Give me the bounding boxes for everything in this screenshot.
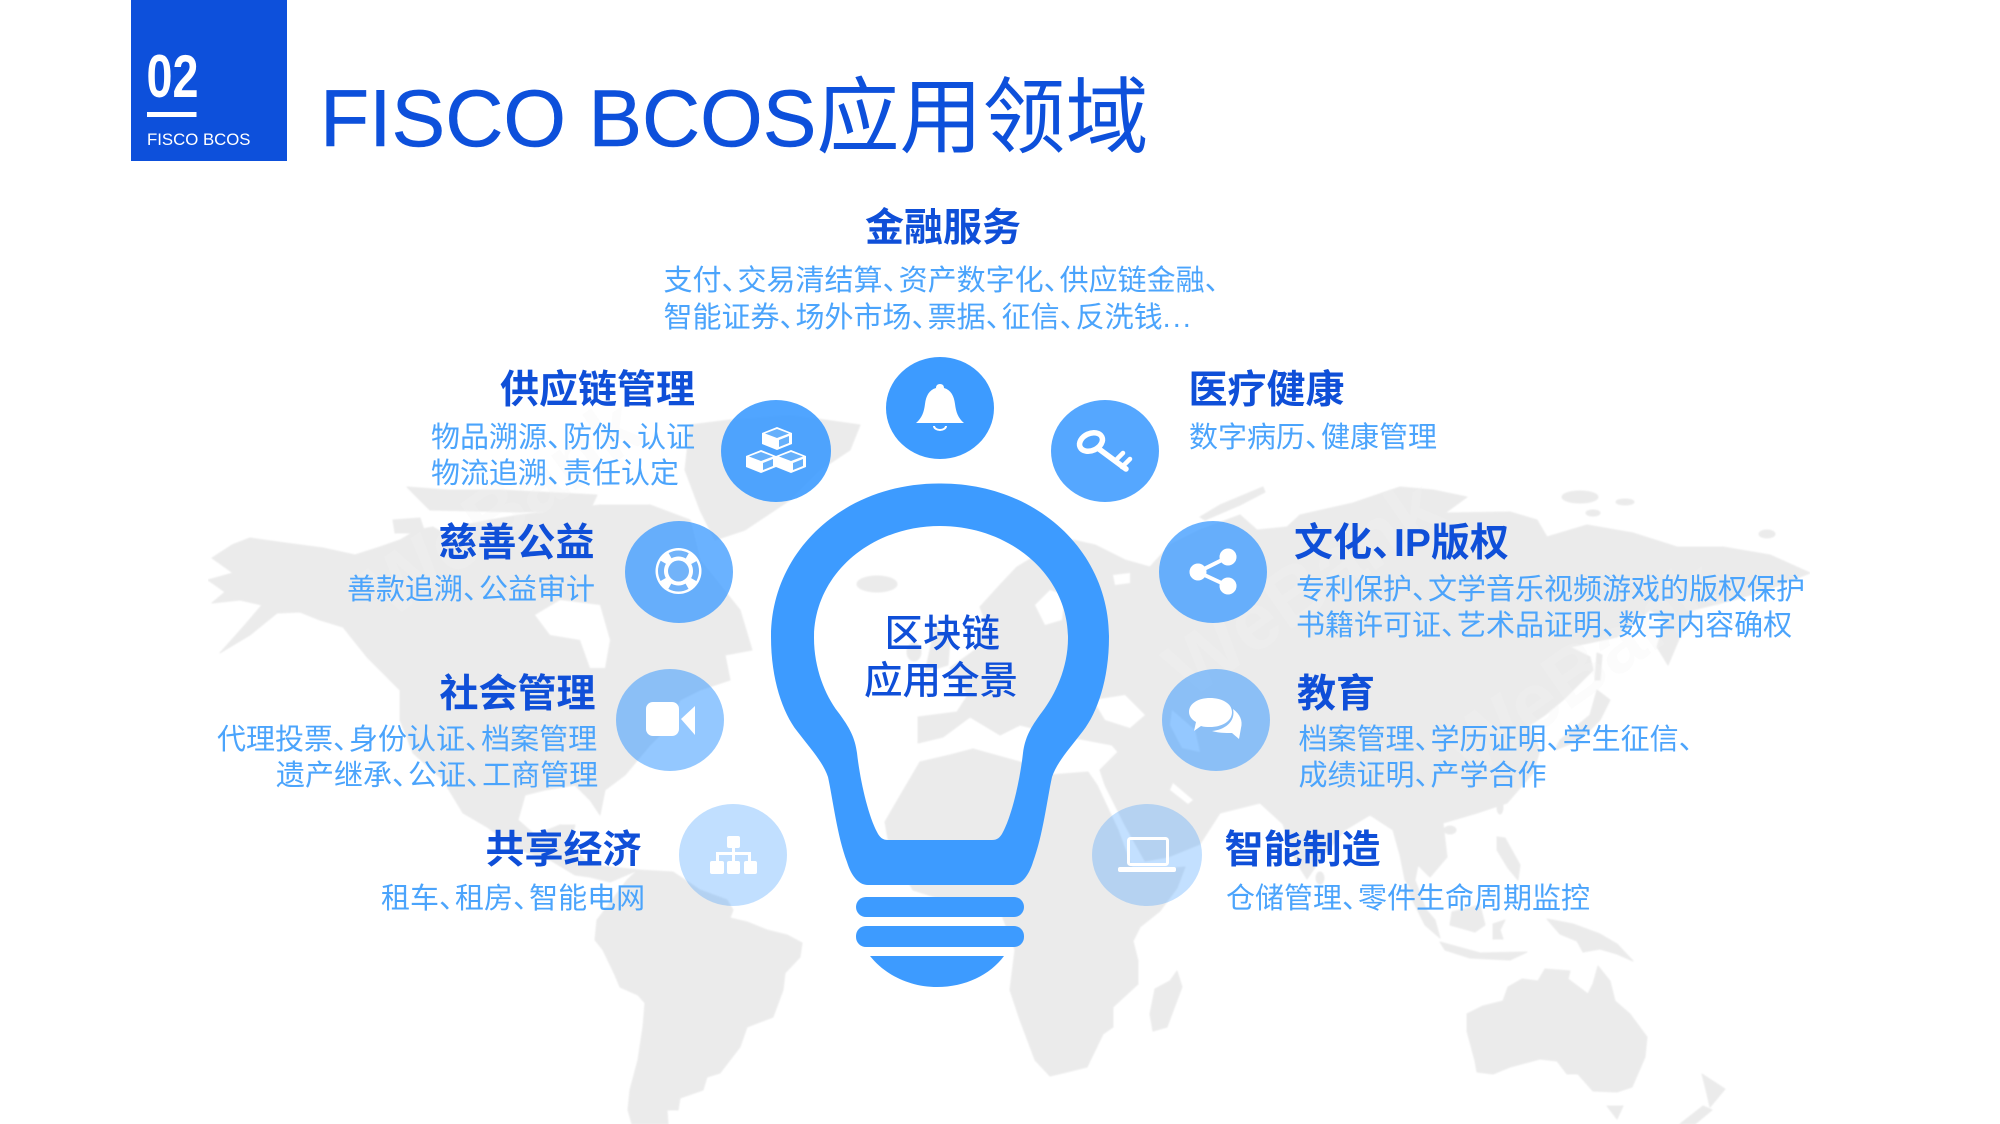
- icon circle: lifebuoy: [625, 521, 733, 623]
- description: 代理投票、身份认证、档案管理: [217, 723, 597, 756]
- badge caption: FISCO BCOS: [147, 130, 250, 149]
- map: south america: [595, 870, 802, 1124]
- icon circle: share: [1159, 521, 1267, 623]
- faint watermark: WeBank: [1149, 461, 1458, 714]
- description: 支付、交易清结算、资产数字化、供应链金融、: [664, 264, 1234, 297]
- map: eurasia: [918, 487, 1810, 915]
- heading: 供应链管理: [500, 369, 695, 412]
- description: 遗产继承、公证、工商管理: [276, 759, 598, 792]
- bulb base stripes: [856, 897, 1024, 987]
- heading: 文化、IP版权: [1294, 522, 1509, 565]
- bulb center label: 应用全景: [864, 660, 1018, 703]
- description: 仓储管理、零件生命周期监控: [1226, 882, 1590, 915]
- bulb center label: 区块链: [884, 613, 1000, 656]
- panel: finance: [664, 207, 1234, 334]
- map: hudson bay: [535, 600, 610, 668]
- panel: education: [1297, 673, 1708, 792]
- description: 专利保护、文学音乐视频游戏的版权保护: [1296, 573, 1805, 606]
- panel: smart manufacturing: [1224, 829, 1590, 915]
- heading: 慈善公益: [438, 522, 595, 565]
- description: [431, 421, 695, 490]
- title: FISCO BCOS应用领域: [320, 71, 1148, 164]
- panel: supply chain: [431, 369, 695, 490]
- icon circle: video: [616, 669, 724, 771]
- panel: culture and IP: [1294, 522, 1805, 642]
- description: 物流追溯、责任认定: [431, 457, 679, 490]
- map: north america: [208, 505, 752, 882]
- map: islands: [857, 487, 1775, 1124]
- description: 书籍许可证、艺术品证明、数字内容确权: [1296, 609, 1792, 642]
- description: 物品溯源、防伪、认证: [431, 421, 695, 454]
- heading: 社会管理: [440, 673, 596, 716]
- icon circle: org chart: [679, 804, 787, 906]
- section number: 02: [146, 43, 198, 110]
- background world map: [208, 415, 1810, 1124]
- faint watermark: WeBank: [349, 381, 658, 634]
- heading: 智能制造: [1224, 829, 1381, 872]
- bulb glass outline: [771, 483, 1109, 885]
- heading: 教育: [1297, 673, 1375, 716]
- description: [1298, 723, 1708, 792]
- description: [217, 723, 598, 792]
- icon circle: bell: [886, 357, 994, 459]
- heading: 医疗健康: [1188, 369, 1345, 412]
- description: 成绩证明、产学合作: [1298, 759, 1547, 792]
- map: greenland: [685, 415, 860, 540]
- badge underline: [147, 112, 196, 117]
- faint watermark: WeBank: [1429, 541, 1738, 794]
- description: 智能证券、场外市场、票据、征信、反洗钱...: [664, 301, 1193, 334]
- faint watermark: [349, 381, 1738, 794]
- description: 档案管理、学历证明、学生征信、: [1298, 723, 1708, 756]
- map: canadian arctic islands: [393, 487, 597, 533]
- map: africa: [885, 749, 1185, 1076]
- icon circle: laptop: [1092, 804, 1202, 906]
- description: 租车、租房、智能电网: [381, 882, 645, 915]
- panel: charity: [347, 522, 595, 606]
- description: 善款追溯、公益审计: [347, 573, 595, 606]
- description: 数字病历、健康管理: [1189, 421, 1437, 454]
- bulb center label: [864, 613, 1018, 703]
- icon circle: key: [1051, 400, 1159, 502]
- icon circle: chat: [1162, 669, 1270, 771]
- panel: sharing economy: [381, 829, 645, 915]
- description: [664, 264, 1234, 334]
- header badge: [131, 0, 287, 161]
- heading: 共享经济: [486, 829, 642, 872]
- panel: social governance: [217, 673, 598, 792]
- map: inland seas: [1035, 573, 1200, 804]
- heading: 金融服务: [865, 207, 1021, 250]
- panel: healthcare: [1188, 369, 1437, 454]
- light bulb: [771, 483, 1109, 987]
- description: [1296, 573, 1805, 642]
- icon circle: cubes: [721, 400, 831, 502]
